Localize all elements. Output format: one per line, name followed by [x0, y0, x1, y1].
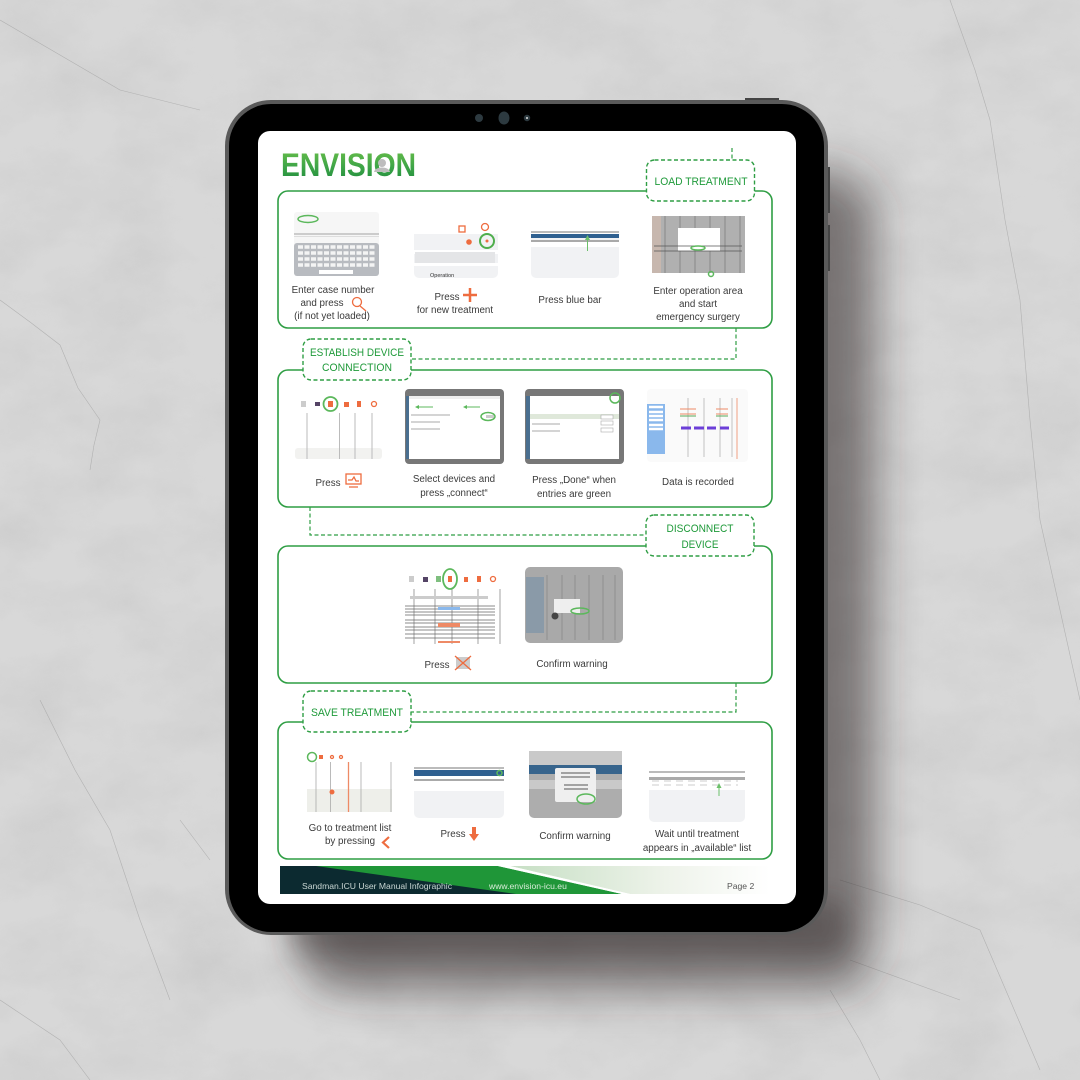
caption: go to treatment list: by pressing — [325, 836, 375, 847]
screenshot: case number keyboard — [294, 212, 379, 276]
footer text: manual title: Sandman.ICU User Manual Infographic — [302, 881, 453, 891]
screenshot: disconnect toolbar — [404, 567, 501, 644]
connector: disconnect to save treatment — [411, 683, 736, 712]
caption: enter operation area: emergency surgery — [656, 312, 740, 323]
tablet device — [225, 98, 830, 935]
connector: load treatment to establish connection — [411, 328, 736, 359]
caption: wait until treatment: appears in „available“ list — [643, 843, 751, 854]
screenshot: new treatment menu: Operation — [430, 273, 454, 279]
caption: confirm warning: Confirm warning — [539, 831, 611, 842]
caption: confirm warning: Confirm warning — [536, 659, 608, 670]
panel: load treatment — [278, 160, 772, 328]
caption: press monitor — [315, 474, 361, 489]
icon: back chevron — [383, 837, 389, 848]
heading: load treatment: LOAD TREATMENT — [654, 176, 748, 188]
logo: ENVISION: ENVISION — [281, 147, 416, 183]
screenshot: new treatment menu — [414, 214, 498, 279]
icon: monitor — [346, 474, 361, 487]
heading: save treatment — [303, 691, 411, 732]
caption: press down arrow — [440, 827, 479, 841]
icon: down arrow — [469, 827, 479, 841]
caption: data is recorded: Data is recorded — [662, 477, 734, 488]
screenshot: back to list — [306, 748, 393, 812]
caption: press plus: Press — [434, 292, 460, 303]
icon: crossed monitor — [455, 656, 471, 670]
caption: press blue bar: Press blue bar — [538, 295, 602, 306]
heading: load treatment — [646, 160, 754, 201]
screenshot: emergency surgery dialog — [652, 212, 745, 277]
heading: disconnect device: DISCONNECT — [666, 523, 734, 535]
screenshot: treatment list save — [414, 750, 504, 818]
heading: establish device connection: CONNECTION — [322, 362, 392, 374]
heading: establish device connection: ESTABLISH DEVICE — [310, 347, 404, 359]
caption: press monitor: Press — [315, 478, 341, 489]
screenshot: treatment list blue bar — [531, 213, 619, 278]
caption: enter case number — [292, 285, 375, 322]
screenshot: select devices — [405, 389, 504, 464]
caption: go to treatment list — [309, 823, 392, 848]
panel: establish device connection — [278, 339, 772, 507]
footer text: website: www.envision-icu.eu — [488, 881, 567, 891]
caption: press plus: for new treatment — [417, 305, 493, 316]
screen page — [258, 131, 796, 904]
connector: establish connection to disconnect — [310, 507, 646, 535]
caption: press done: entries are green — [537, 489, 611, 500]
caption: press crossed monitor — [424, 656, 471, 671]
caption: press crossed monitor: Press — [424, 660, 450, 671]
caption: go to treatment list: Go to treatment list — [309, 823, 392, 834]
screenshot: data recorded chart — [647, 389, 748, 462]
caption: enter operation area — [653, 286, 743, 323]
screenshot: available list — [649, 750, 745, 822]
caption: enter case number: and press — [300, 298, 344, 309]
icon: magnifier — [352, 298, 366, 311]
caption: select devices: press „connect“ — [420, 488, 488, 499]
heading: disconnect device — [646, 515, 754, 556]
connector: top to load treatment — [731, 148, 733, 160]
heading: establish device connection — [303, 339, 411, 380]
heading: disconnect device: DEVICE — [682, 539, 718, 551]
caption: press done: Press „Done“ when — [532, 475, 616, 486]
footer banner — [280, 866, 770, 894]
caption: press down arrow: Press — [440, 829, 466, 840]
caption: wait until treatment: Wait until treatment — [655, 829, 739, 840]
panel: save treatment — [278, 691, 772, 859]
screenshot: entries green — [525, 389, 624, 464]
heading: save treatment: SAVE TREATMENT — [311, 707, 403, 719]
caption: wait until treatment — [643, 829, 751, 854]
caption: enter operation area: and start — [679, 299, 717, 310]
caption: enter operation area: Enter operation area — [653, 286, 743, 297]
caption: select devices — [413, 474, 495, 499]
caption: enter case number: Enter case number — [292, 285, 375, 296]
panel: disconnect device — [278, 515, 772, 683]
tablet shadow — [290, 170, 875, 990]
icon: plus — [463, 288, 477, 302]
screenshot: toolbar with monitor icon — [295, 395, 382, 459]
caption: select devices: Select devices and — [413, 474, 495, 485]
camera: sensors — [475, 112, 530, 124]
caption: press done — [532, 475, 616, 500]
screenshot: confirm save warning — [529, 751, 622, 818]
caption: press plus — [417, 288, 493, 316]
footer text: page number: Page 2 — [727, 881, 754, 891]
screenshot: confirm disconnect — [525, 567, 623, 643]
caption: enter case number: (if not yet loaded) — [294, 311, 370, 322]
